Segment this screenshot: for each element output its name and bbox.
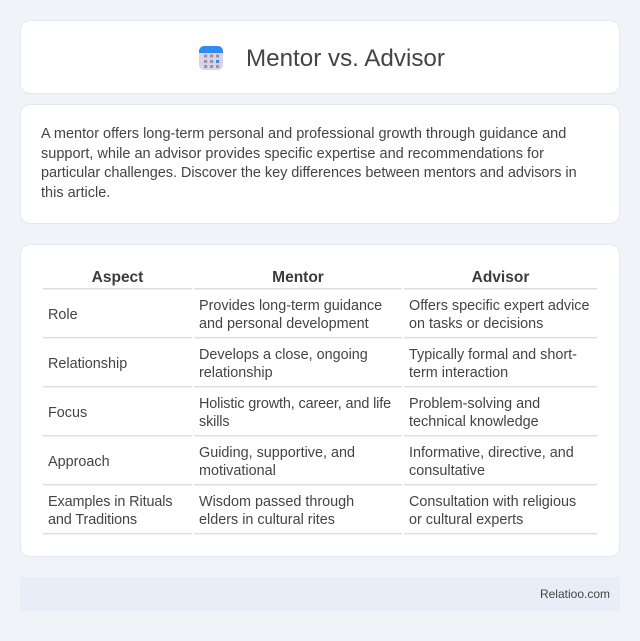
Examples mentor	[199, 494, 354, 528]
intro text: support, while an advisor provides specific expertise and recommendations for	[41, 146, 544, 162]
row: Role: Role	[48, 307, 78, 323]
Role mentor: and personal development	[199, 316, 369, 332]
Role mentor: Provides long-term guidance	[199, 298, 382, 314]
header: Mentor: Mentor	[272, 269, 324, 286]
title card	[20, 20, 620, 94]
footer text: Relatioo.com	[540, 587, 610, 601]
Approach advisor: consultative	[409, 463, 485, 479]
Focus advisor: Problem-solving and	[409, 396, 540, 412]
Role advisor: on tasks or decisions	[409, 316, 543, 332]
Approach mentor: motivational	[199, 463, 276, 479]
Approach advisor	[409, 445, 574, 479]
Relationship advisor	[409, 347, 577, 381]
title: Mentor vs. Advisor	[246, 45, 445, 72]
Focus advisor: technical knowledge	[409, 414, 539, 430]
Relationship advisor: term interaction	[409, 365, 508, 381]
footer	[20, 577, 620, 611]
Role advisor	[409, 298, 590, 332]
Role mentor	[199, 298, 382, 332]
intro card	[20, 104, 620, 224]
intro text	[41, 126, 577, 200]
Focus mentor: Holistic growth, career, and life	[199, 396, 391, 412]
Focus mentor	[199, 396, 391, 430]
Examples mentor: Wisdom passed through	[199, 494, 354, 510]
row: Examples	[48, 494, 172, 528]
Examples mentor: elders in cultural rites	[199, 512, 335, 528]
intro text: particular challenges. Discover the key differences between mentors and advisors in	[41, 165, 577, 181]
Approach mentor: Guiding, supportive, and	[199, 445, 355, 461]
Relationship mentor: Develops a close, ongoing	[199, 347, 368, 363]
row: Focus: Focus	[48, 405, 87, 421]
intro text: A mentor offers long-term personal and professional growth through guidance and	[41, 126, 566, 142]
icon: calendar	[199, 46, 223, 70]
header: Advisor: Advisor	[472, 269, 529, 286]
row: Relationship: Relationship	[48, 356, 127, 372]
row: Examples: and Traditions	[48, 512, 137, 528]
Approach advisor: Informative, directive, and	[409, 445, 574, 461]
row: Approach: Approach	[48, 454, 110, 470]
Relationship mentor	[199, 347, 368, 381]
Focus advisor	[409, 396, 540, 430]
Role advisor: Offers specific expert advice	[409, 298, 590, 314]
Examples advisor	[409, 494, 576, 528]
Examples advisor: Consultation with religious	[409, 494, 576, 510]
Relationship advisor: Typically formal and short-	[409, 347, 577, 363]
Focus mentor: skills	[199, 414, 229, 430]
table card	[20, 244, 620, 557]
header: Aspect: Aspect	[92, 269, 143, 286]
Relationship mentor: relationship	[199, 365, 273, 381]
Examples advisor: or cultural experts	[409, 512, 523, 528]
intro text: this article.	[41, 184, 110, 200]
Approach mentor	[199, 445, 355, 479]
row: Examples: Examples in Rituals	[48, 494, 172, 510]
